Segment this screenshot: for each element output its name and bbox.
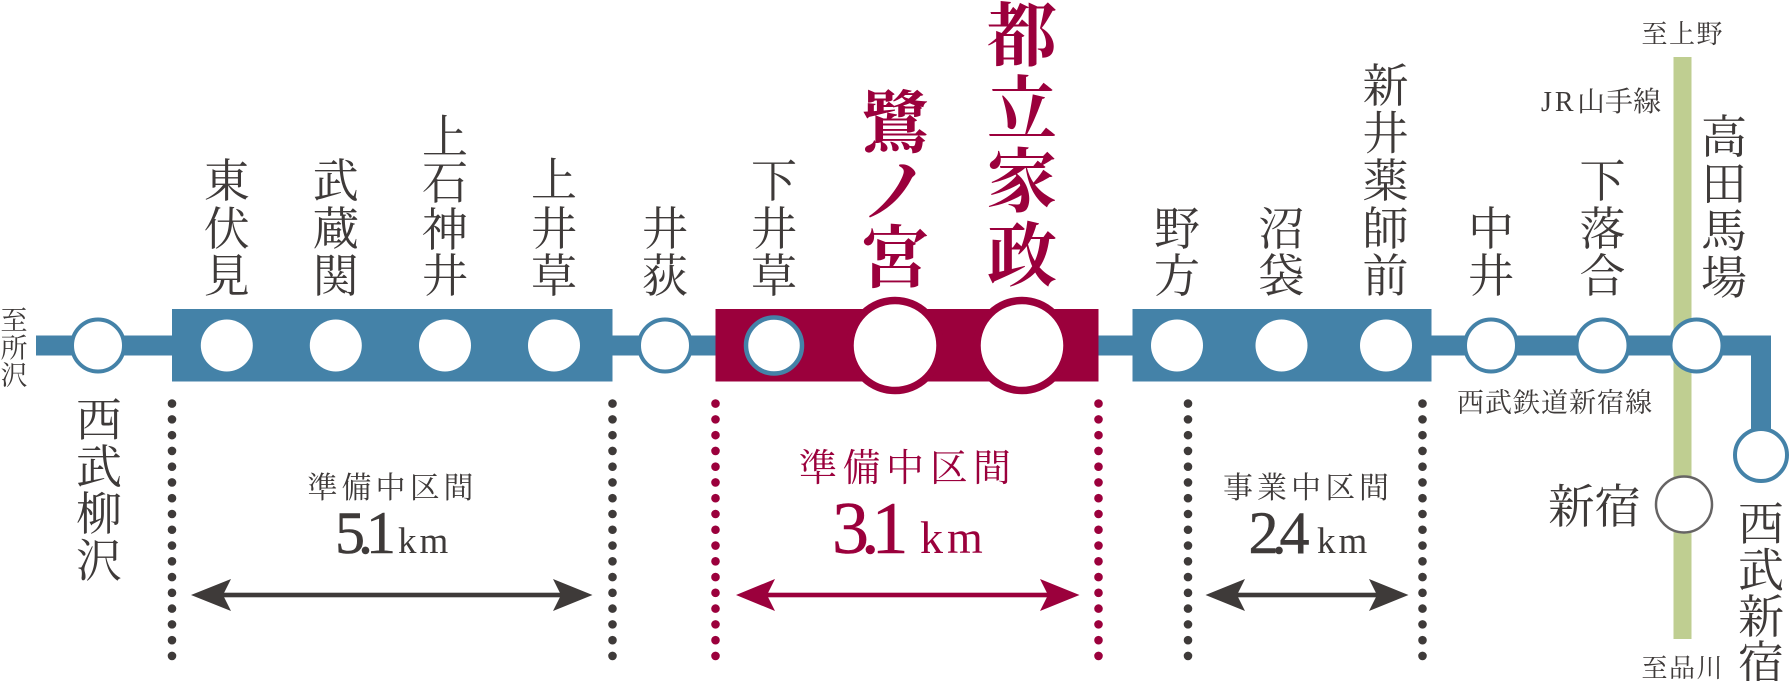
distance west: 5.1	[335, 500, 389, 566]
station name: 武蔵関: 武蔵関	[313, 156, 359, 302]
distance west: km	[398, 521, 451, 562]
Shinjuku JR station	[1656, 476, 1712, 532]
section status crimson: 準備中区間	[799, 448, 1017, 490]
direction label: 至所沢: 至所沢	[0, 306, 28, 391]
section status west: 準備中区間	[308, 472, 478, 505]
station name: 中井: 中井	[1468, 204, 1514, 302]
blue section band east	[1132, 309, 1432, 382]
Shimo-Igusa station	[746, 318, 802, 374]
station name: 野方: 野方	[1154, 204, 1200, 302]
arrow east	[1206, 579, 1408, 611]
highlighted stations	[850, 300, 1067, 390]
station name: 新井薬師前: 新井薬師前	[1362, 61, 1408, 302]
line label: JR山手線: 山手線	[1577, 86, 1661, 118]
station name: 東伏見: 東伏見	[204, 156, 250, 302]
Seibu Shinjuku line track	[36, 346, 1761, 440]
dotted boundaries crimson	[716, 404, 1098, 657]
section label east	[1223, 472, 1393, 566]
station name: 上井草: 上井草	[531, 155, 577, 302]
section label west	[308, 472, 478, 566]
distance crimson: km	[920, 512, 987, 563]
line label: JR山手線: JR	[1541, 87, 1577, 118]
station name: 下落合: 下落合	[1580, 156, 1626, 302]
arrow west	[191, 579, 592, 611]
section status east: 事業中区間	[1223, 472, 1393, 505]
dotted boundaries west	[172, 404, 612, 657]
JR Yamanote line	[1674, 57, 1692, 639]
line label: 西武鉄道新宿線: 西武鉄道新宿線	[1457, 388, 1653, 418]
distance east: km	[1317, 521, 1370, 562]
section label crimson	[799, 448, 1017, 570]
station name: 高田馬場: 高田馬場	[1701, 112, 1747, 304]
blue section band west	[172, 309, 612, 382]
arrow crimson	[736, 579, 1080, 611]
station name: 井荻: 井荻	[642, 204, 688, 302]
station name: 上石神井: 上石神井	[422, 112, 468, 302]
distance east: 2.4	[1248, 500, 1302, 566]
dotted boundaries east	[1188, 404, 1422, 657]
station name: 沼袋: 沼袋	[1258, 204, 1304, 302]
stations on east band	[1151, 320, 1412, 372]
distance crimson: 3.1	[832, 488, 900, 570]
station name: 都立家政: 都立家政	[987, 0, 1057, 296]
direction label: 至上野: 至上野	[1642, 20, 1724, 49]
crimson section band	[716, 309, 1098, 382]
stations on west band	[201, 320, 580, 372]
station name: 鷺ノ宮: 鷺ノ宮	[861, 86, 929, 297]
station name: 新宿: 新宿	[1548, 482, 1641, 534]
open stations on line	[72, 320, 1787, 481]
station name: 西武柳沢: 西武柳沢	[76, 395, 122, 587]
station name: 下井草: 下井草	[751, 156, 797, 302]
